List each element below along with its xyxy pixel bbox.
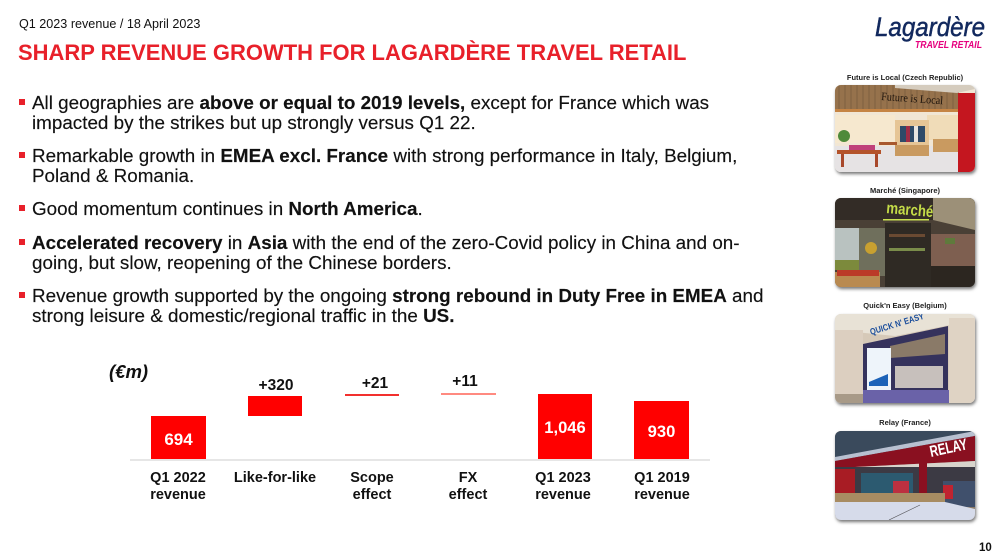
axis label: Q1 2023 revenue: revenue: [535, 487, 591, 503]
page number: 10: [979, 542, 992, 554]
bullet: EMEA: [19, 145, 737, 186]
axis label: like-for-like: Like-for-like: [234, 470, 316, 486]
caption: Future is Local: Future is Local (Czech Republic): [847, 73, 963, 82]
bar: Q1 2019 revenue: 930: [648, 422, 675, 441]
axis label: Q1 2019 revenue: [634, 470, 690, 503]
bullet: Duty Free: Revenue growth supported by the ongoing strong rebound in Duty Free in EMEA and: [32, 285, 763, 306]
caption: Marché: Marché (Singapore): [870, 186, 940, 195]
photo: Future is Local store: Future is Local: [881, 91, 943, 107]
bar: Q1 2019 revenue: [634, 401, 689, 459]
photo: Quick'n Easy store: [835, 314, 975, 403]
bullet: Asia: Accelerated recovery in Asia with the end of the zero-Covid policy in China and on-: [32, 232, 740, 253]
bar: Q1 2023 revenue: 1,046: [544, 418, 586, 437]
waterfall chart: [109, 361, 710, 503]
bullet: Asia: going, but slow, reopening of the Chinese borders.: [32, 252, 452, 273]
axis label: Q1 2023 revenue: Q1 2023: [535, 470, 591, 486]
bullet: geographies: impacted by the strikes but up strongly versus Q1 22.: [32, 112, 476, 133]
value: +21: +21: [362, 375, 388, 392]
caption: Relay: Relay (France): [879, 418, 931, 427]
title: SHARP REVENUE GROWTH FOR LAGARDÈRE TRAVEL RETAIL: [18, 40, 686, 65]
bar: Q1 2022 revenue: [151, 416, 206, 459]
axis label: Q1 2022 revenue: revenue: [150, 487, 206, 503]
value: +11: +11: [452, 373, 478, 390]
bullet: North America: Good momentum continues in North America.: [32, 198, 423, 219]
axis label: Q1 2022 revenue: Q1 2022: [150, 470, 206, 486]
bar: scope effect: [345, 394, 399, 396]
axis label: Q1 2019 revenue: Q1 2019: [634, 470, 690, 486]
axis label: Q1 2019 revenue: revenue: [634, 487, 690, 503]
axis label: FX effect: FX: [459, 470, 477, 486]
axis label: scope effect: Scope: [350, 470, 394, 486]
bar: FX effect: [441, 393, 496, 395]
date line: Q1 2023 revenue / 18 April 2023: [19, 17, 200, 31]
axis label: Q1 2022 revenue: [150, 470, 206, 503]
bullet: Asia: [19, 232, 740, 274]
bullet: EMEA: Poland & Romania.: [32, 165, 194, 186]
photo: Future is Local store: [835, 85, 975, 172]
bullet: Duty Free: [19, 285, 763, 326]
axis label: FX effect: effect: [449, 487, 487, 503]
axis label: scope effect: effect: [353, 487, 391, 503]
photo: Marché store: marché: [886, 200, 934, 221]
caption: Quick'n Easy: Quick'n Easy (Belgium): [863, 301, 947, 310]
value: +320: +320: [259, 377, 293, 394]
axis label: Q1 2023 revenue: [535, 470, 591, 503]
bullet: geographies: All geographies are above or equal to 2019 levels, except for France which was: [32, 92, 709, 113]
bullet: EMEA: Remarkable growth in EMEA excl. France with strong performance in Italy, Belgium,: [32, 145, 737, 166]
axis label: scope effect: [350, 470, 394, 503]
photo: Relay store: [835, 431, 975, 520]
bar: like-for-like: [248, 396, 302, 416]
unit label: (€m): [109, 361, 148, 382]
photo: Marché store: [835, 198, 975, 287]
bar: Q1 2023 revenue: [538, 394, 592, 459]
bullet list: [19, 92, 763, 326]
axis label: FX effect: [449, 470, 488, 503]
bar: Q1 2022 revenue: 694: [164, 430, 193, 449]
bullet: geographies: [19, 92, 709, 134]
bullet: Duty Free: strong leisure & domestic/regional traffic in the US.: [32, 305, 454, 326]
